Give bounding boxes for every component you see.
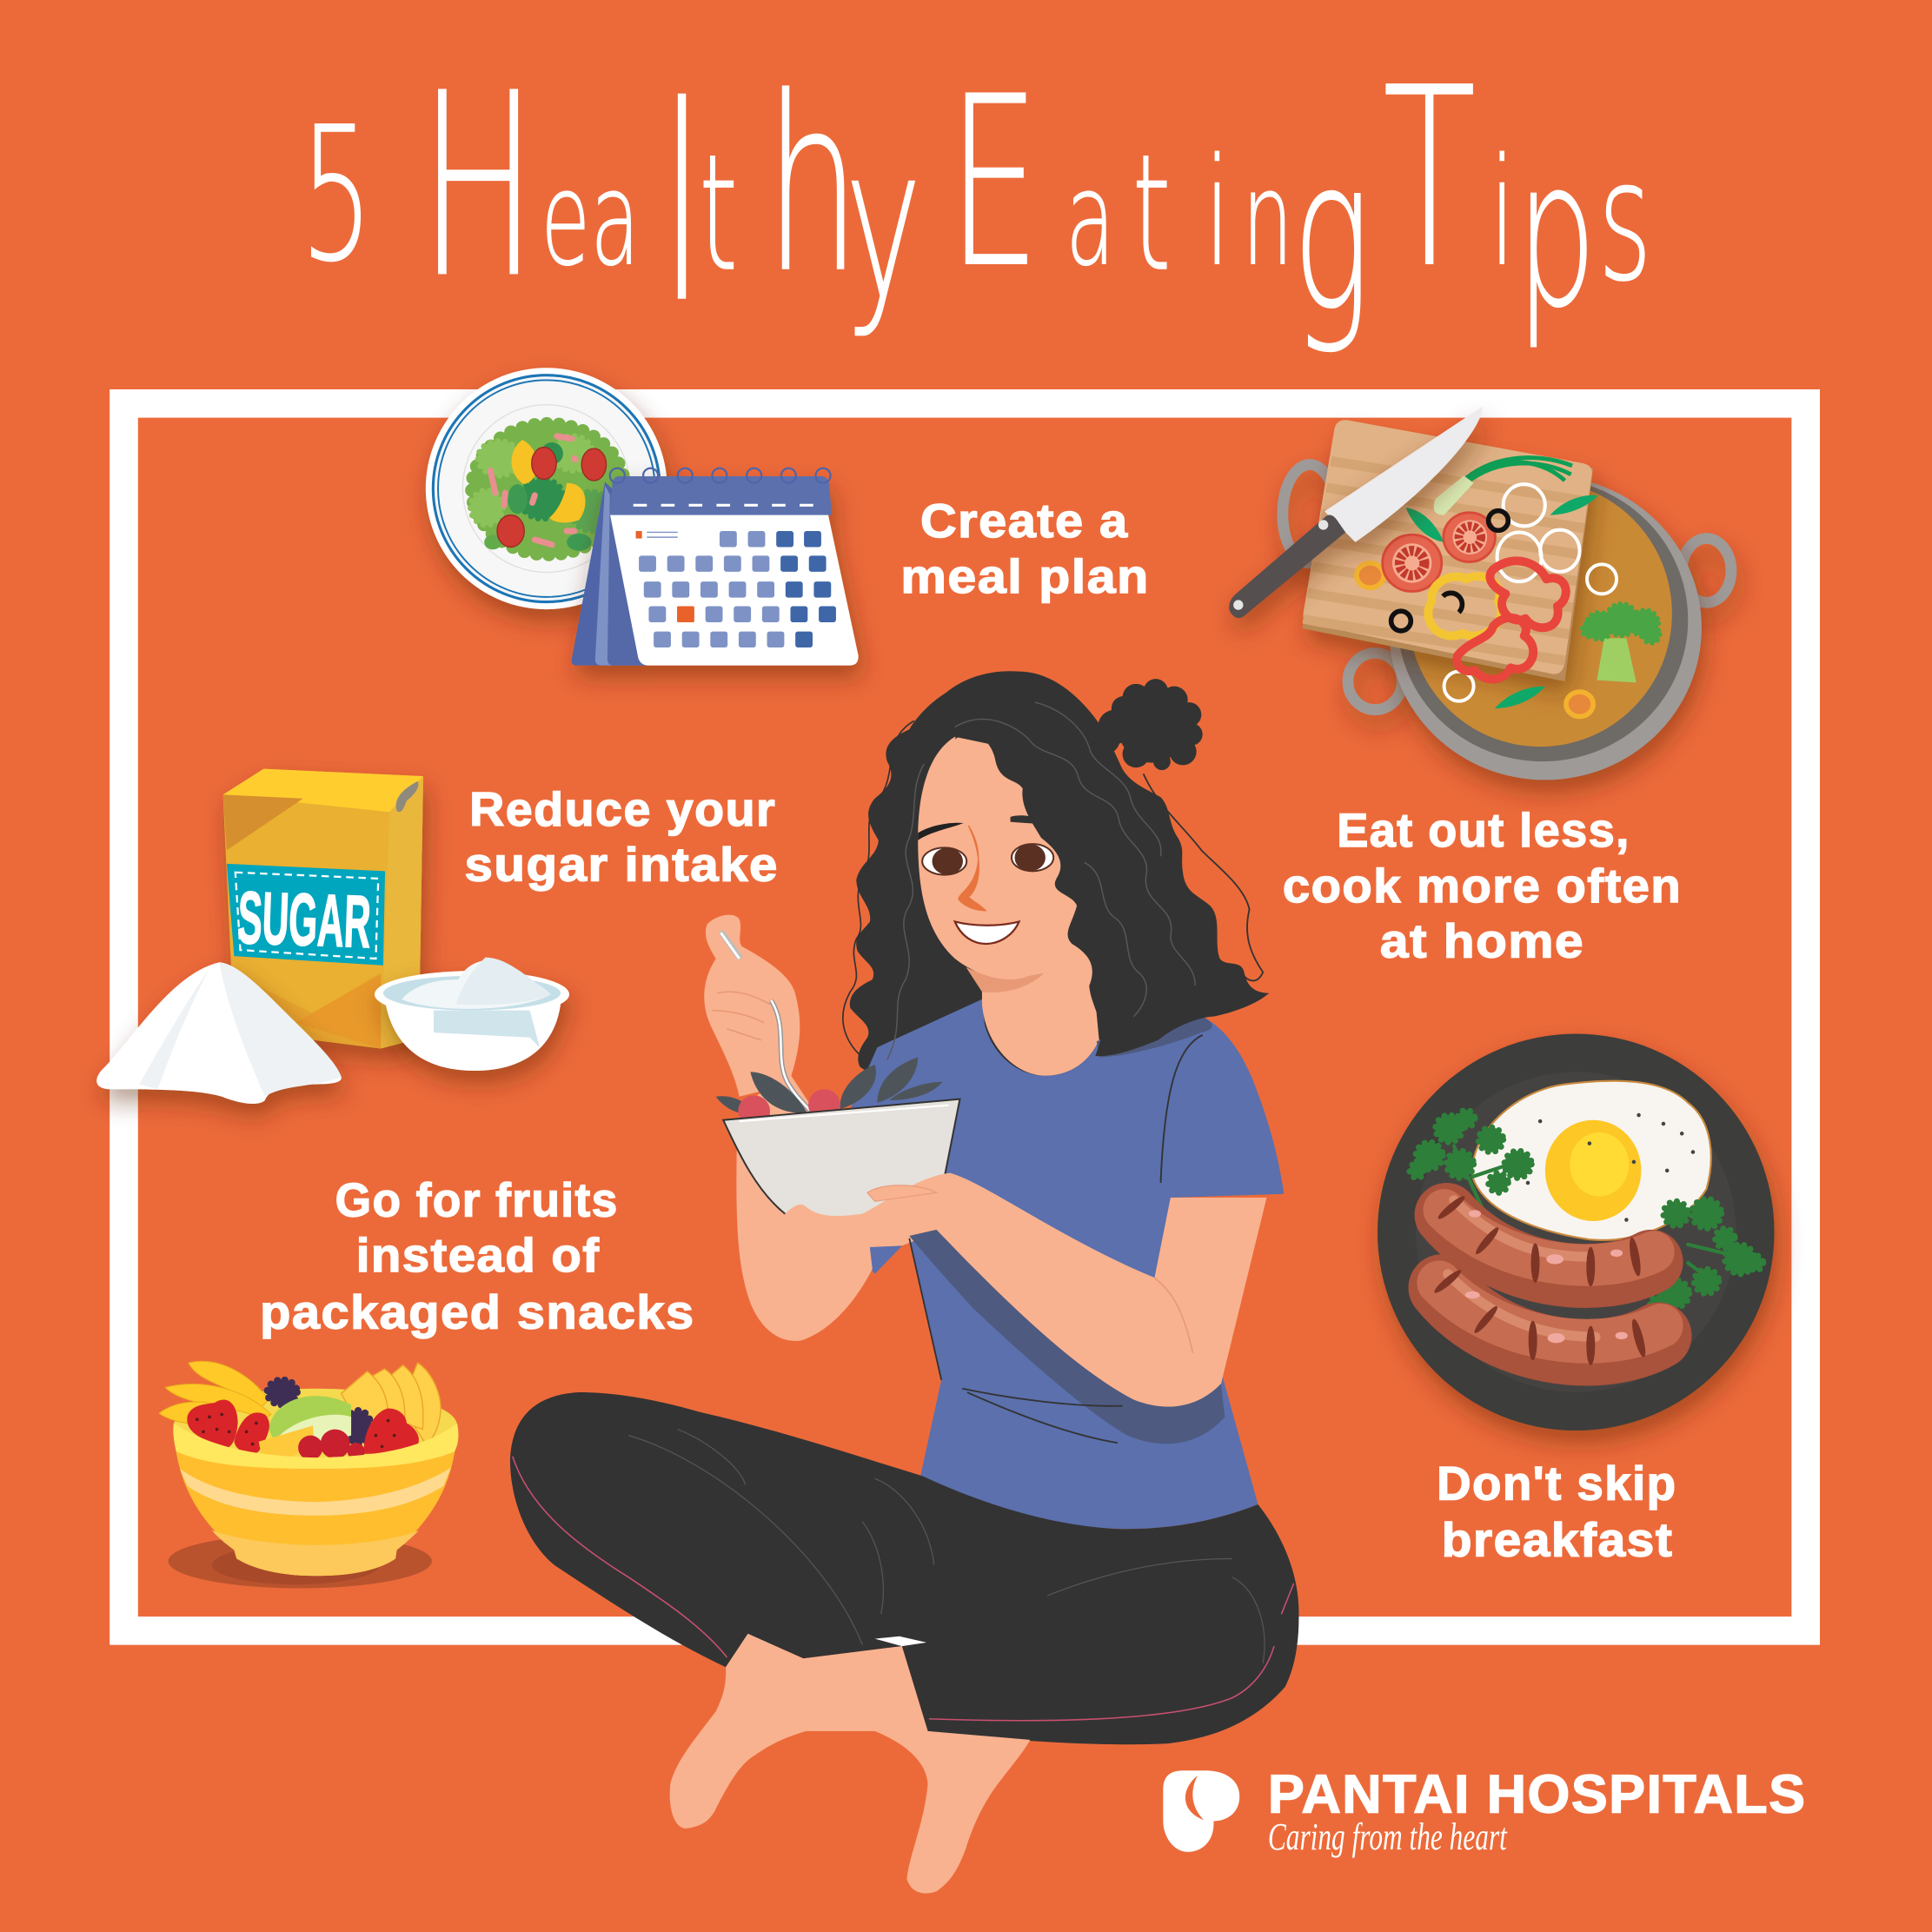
illustration: woman eating salad [510, 671, 1298, 1894]
white frame [123, 403, 1806, 1630]
icon: sugar box and pile [96, 769, 569, 1104]
title: i [1205, 128, 1230, 299]
title: 5 [300, 88, 373, 302]
bananas [159, 1361, 271, 1427]
title: t [1132, 122, 1171, 308]
mango cube [259, 1425, 315, 1457]
back hair [843, 671, 1203, 1085]
logo mark [1163, 1770, 1239, 1852]
parsley left [1410, 1110, 1531, 1213]
brand name: PANTAI HOSPITALS [1268, 1764, 1806, 1824]
tip: eat out less: at home [1380, 915, 1584, 968]
lettuce [471, 424, 625, 554]
blackberries [268, 1380, 371, 1443]
tomatoes [497, 448, 607, 547]
tip: create a meal plan [900, 495, 1150, 603]
sugar pile [96, 962, 342, 1104]
fried egg [1472, 1081, 1711, 1240]
title [300, 35, 1652, 362]
title: H [420, 41, 537, 334]
pot body [1389, 475, 1702, 780]
calendar cells [639, 531, 836, 647]
shirt folds and sleeve [909, 1035, 1203, 1443]
title: y [845, 103, 922, 346]
legs and pants [510, 1392, 1298, 1744]
ham strips [490, 436, 575, 545]
pants seams [513, 1430, 1294, 1721]
title: g [1292, 115, 1371, 358]
salad bowl [723, 1099, 959, 1220]
far hand with fork [704, 915, 873, 1341]
tip: eat out less: Eat out less, [1337, 804, 1630, 857]
bowl shadow [169, 1534, 432, 1588]
sugar box [223, 769, 423, 1048]
body shirt [850, 999, 1284, 1529]
tip: create a meal plan: Create a [920, 495, 1129, 548]
small sugar bowl [375, 971, 569, 1071]
cherries [298, 1430, 365, 1460]
spring onion [1466, 458, 1572, 483]
tip: fruits instead of snacks: instead of [356, 1229, 600, 1282]
tip: eat out less [1283, 804, 1682, 968]
yolk [1545, 1120, 1641, 1221]
bowl food [716, 1057, 943, 1127]
orange slices [1357, 563, 1593, 716]
broccoli [1582, 604, 1660, 682]
title: p [1517, 116, 1597, 352]
pepper rings [1428, 561, 1566, 680]
neck [982, 949, 1099, 1076]
neck shadow [966, 955, 1056, 993]
title: T [1383, 35, 1476, 322]
hair strand lines [887, 702, 1195, 1059]
binding rings [610, 468, 831, 483]
tip: don't skip breakfast: Don't skip [1437, 1457, 1677, 1510]
face [918, 737, 1109, 979]
sausage top [1444, 1200, 1654, 1276]
title: a [590, 144, 640, 295]
tip: fruits instead of snacks: packaged snacks [260, 1285, 695, 1338]
facial features [918, 815, 1053, 944]
title: e [541, 144, 590, 295]
pot handles [1283, 464, 1731, 710]
shirt collar shadow [1097, 1017, 1212, 1057]
apple [269, 1396, 351, 1439]
sugar label [227, 864, 385, 966]
sugar word: SUGAR [236, 877, 372, 964]
onion rings [1444, 484, 1617, 701]
tip: don't skip breakfast: breakfast [1442, 1514, 1673, 1567]
bowl body [174, 1430, 457, 1576]
title: h [766, 47, 860, 326]
front hair [955, 672, 1269, 1056]
knife [1229, 407, 1483, 618]
tip: reduce sugar [464, 783, 779, 892]
tip: reduce sugar: Reduce your [469, 783, 776, 836]
arm holding bowl [785, 1173, 1266, 1407]
title: s [1598, 124, 1652, 318]
title: a [1066, 144, 1115, 295]
icon: fruit bowl [159, 1361, 458, 1588]
tip: fruits instead of snacks: Go for fruits [335, 1173, 619, 1226]
tip: reduce sugar: sugar intake [464, 839, 779, 892]
strawberries [187, 1400, 419, 1455]
title: n [1242, 144, 1293, 295]
leaves [1406, 495, 1598, 708]
icon: salad plate [426, 368, 667, 609]
title: l [660, 49, 706, 362]
logo: Pantai Hospitals [1163, 1764, 1806, 1858]
icon: cooking pot with chopping board [1229, 407, 1731, 780]
olive rings [1391, 511, 1508, 631]
icon: desk calendar [572, 468, 859, 666]
feet [670, 1634, 1030, 1894]
tip: create a meal plan: meal plan [900, 550, 1150, 603]
tagline: Caring from the heart [1268, 1816, 1508, 1858]
title: E [948, 46, 1039, 319]
tomato halves [1383, 513, 1495, 592]
tip: fruits instead of snacks [260, 1173, 695, 1338]
tip: eat out less: cook more often [1283, 860, 1682, 913]
calendar pages [572, 481, 647, 666]
chopping board [1281, 420, 1626, 681]
sausage bottom [1439, 1274, 1661, 1352]
title: i [1490, 128, 1515, 299]
title: t [699, 122, 738, 308]
sausage score marks [1432, 1193, 1648, 1365]
hair bun [1091, 679, 1203, 770]
icon: breakfast plate [1378, 1033, 1775, 1431]
peppers [512, 440, 586, 522]
parsley right [1650, 1198, 1763, 1311]
arm shadow [909, 1230, 1225, 1444]
mango slices [342, 1363, 441, 1443]
tip: don't skip breakfast [1437, 1457, 1677, 1567]
